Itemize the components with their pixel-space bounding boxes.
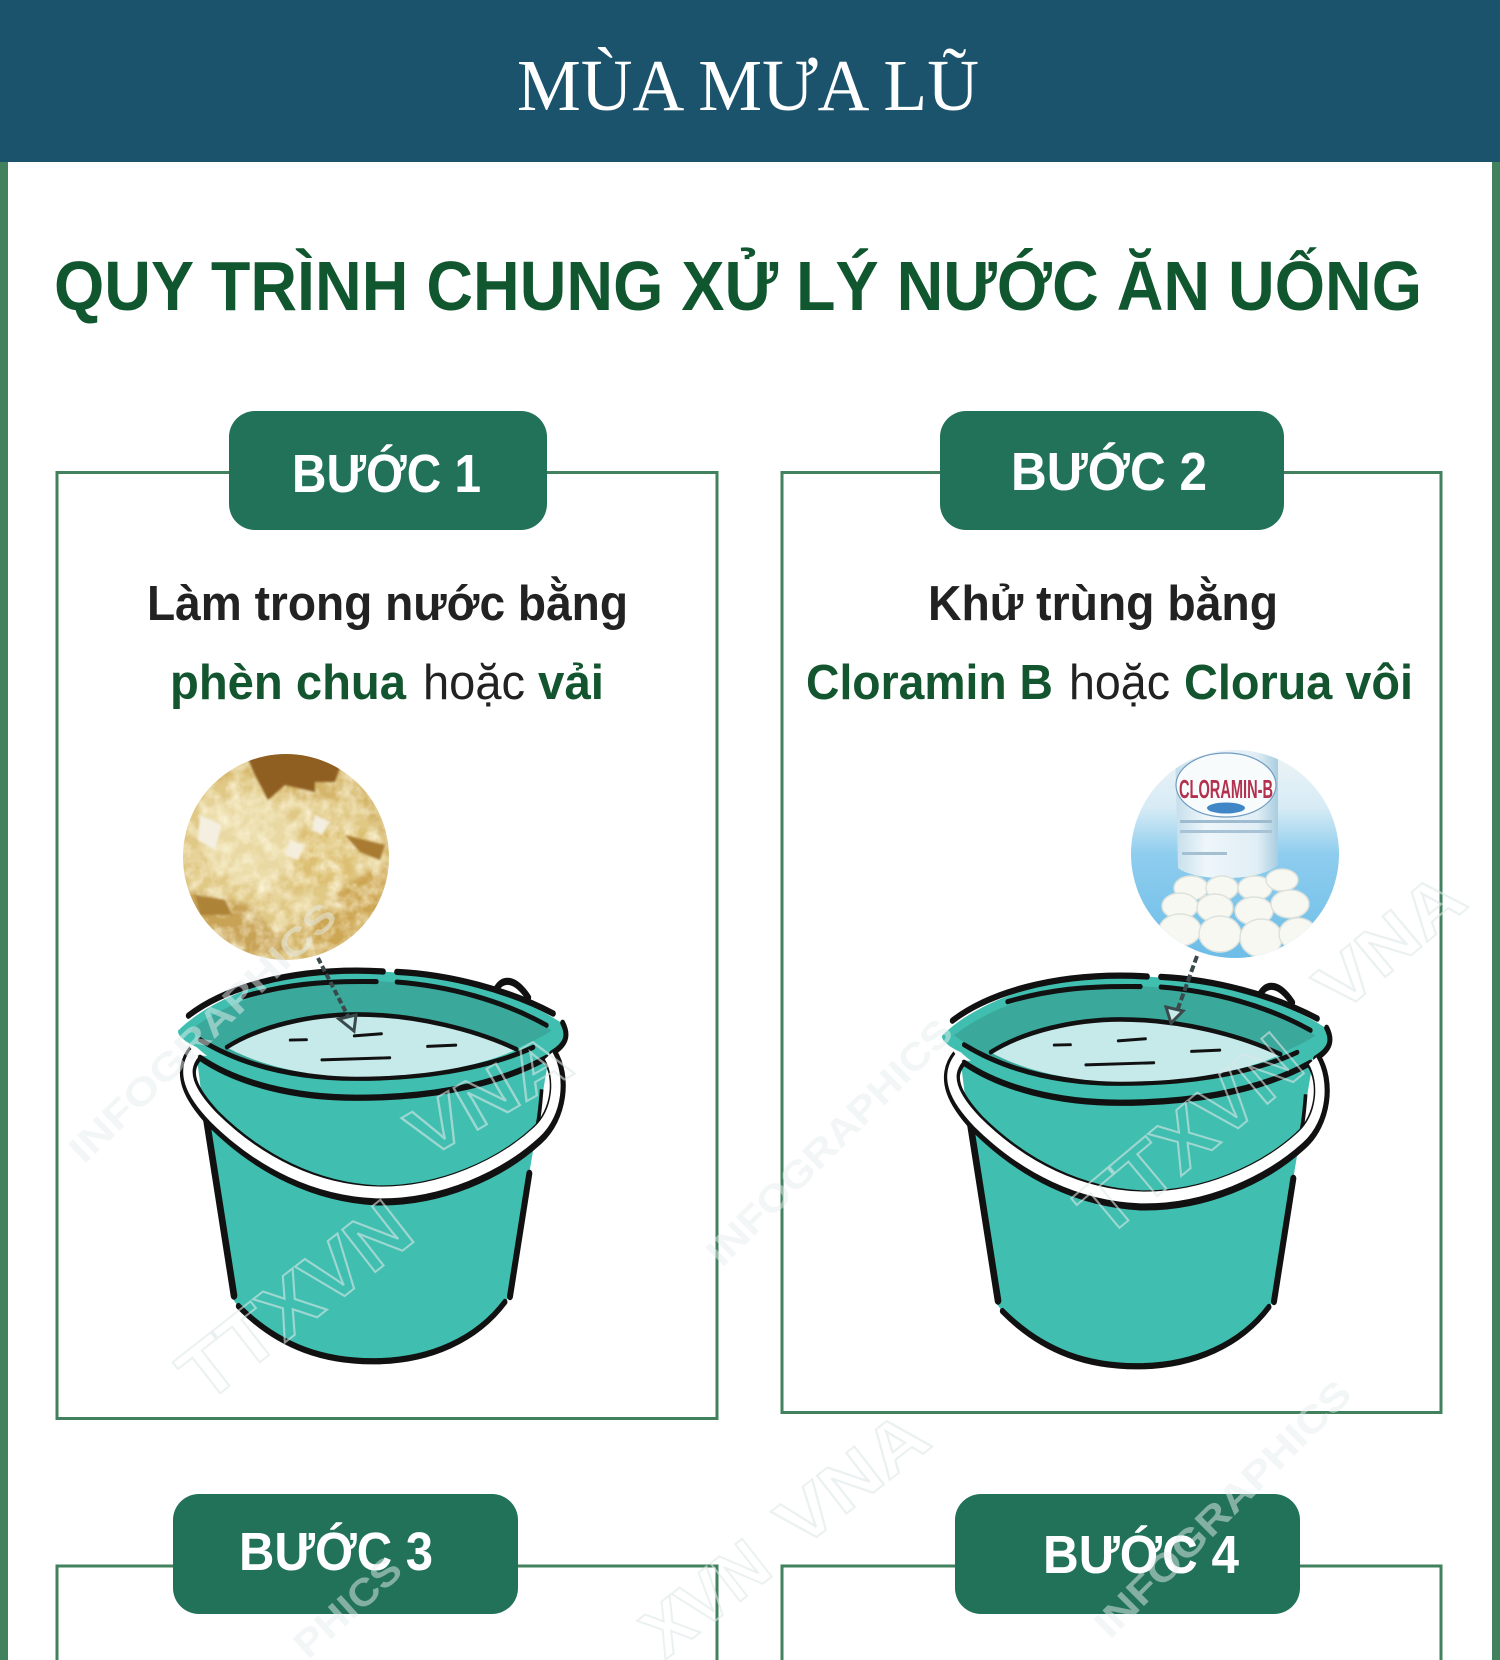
header band: [0, 0, 1500, 162]
step 1 badge: BƯỚC 1: [292, 444, 481, 504]
watermarks: INFOGRAPHICS: [699, 1011, 962, 1274]
step 1 frame: [57, 472, 717, 1418]
step 2 description: Clorua vôi: [1184, 656, 1413, 710]
watermarks: VNA: [394, 1018, 584, 1173]
step 2 description: Khử trùng bằng: [928, 576, 1278, 631]
icon: bucket with water 2: [942, 976, 1330, 1367]
header title: MÙA MƯA LŨ: [517, 45, 979, 126]
watermarks: INFOGRAPHICS: [1087, 1373, 1360, 1646]
watermarks: VNA: [1300, 857, 1480, 1026]
bottle: CLORAMIN-B: [1179, 774, 1273, 804]
arrow: cloramin into bucket: [1166, 956, 1197, 1023]
panel: step 4: [782, 1494, 1441, 1660]
bottle: [1175, 750, 1278, 878]
step 2 description: hoặc: [1069, 656, 1170, 710]
step 3 badge: [173, 1494, 518, 1614]
arrow: alum into bucket: [318, 958, 356, 1031]
step 1 description: Làm trong nước bằng: [147, 576, 628, 631]
right side border: [1492, 0, 1500, 1660]
watermarks: [61, 857, 1480, 1660]
step 4 badge: [955, 1494, 1300, 1614]
icon: bucket with water 1: [178, 971, 566, 1362]
step 1 description: [147, 576, 628, 710]
step 2 badge: [940, 411, 1284, 530]
step 2 frame: [782, 472, 1441, 1412]
photo: alum crystals: [183, 752, 389, 960]
main heading: QUY TRÌNH CHUNG XỬ LÝ NƯỚC ĂN UỐNG: [54, 246, 1422, 325]
panel: step 1: [57, 411, 717, 1418]
photo: Cloramin-B bottle and tablets: [1130, 750, 1340, 958]
watermarks: VNA: [761, 1396, 943, 1562]
step 2 description: [806, 576, 1413, 710]
panel: step 2: [782, 411, 1441, 1412]
step 1 description: phèn chua: [170, 656, 407, 710]
step 2 badge: BƯỚC 2: [1011, 442, 1207, 502]
tablets: [1159, 869, 1317, 957]
step 3 badge: BƯỚC 3: [239, 1522, 433, 1582]
watermarks: TTXVN: [1059, 1015, 1319, 1253]
left side border: [0, 0, 8, 1660]
step 3 frame: [57, 1566, 717, 1660]
step 1 description: hoặc: [423, 656, 525, 710]
watermarks: INFOGRAPHICS: [61, 895, 346, 1171]
watermarks: TTXVN: [161, 1183, 428, 1418]
step 4 frame: [782, 1566, 1441, 1660]
step 4 badge: BƯỚC 4: [1043, 1525, 1239, 1585]
panel: step 3: [57, 1494, 717, 1660]
step 1 description: vải: [538, 656, 604, 710]
step 1 badge: [229, 411, 547, 530]
step 2 description: Cloramin B: [806, 656, 1053, 710]
